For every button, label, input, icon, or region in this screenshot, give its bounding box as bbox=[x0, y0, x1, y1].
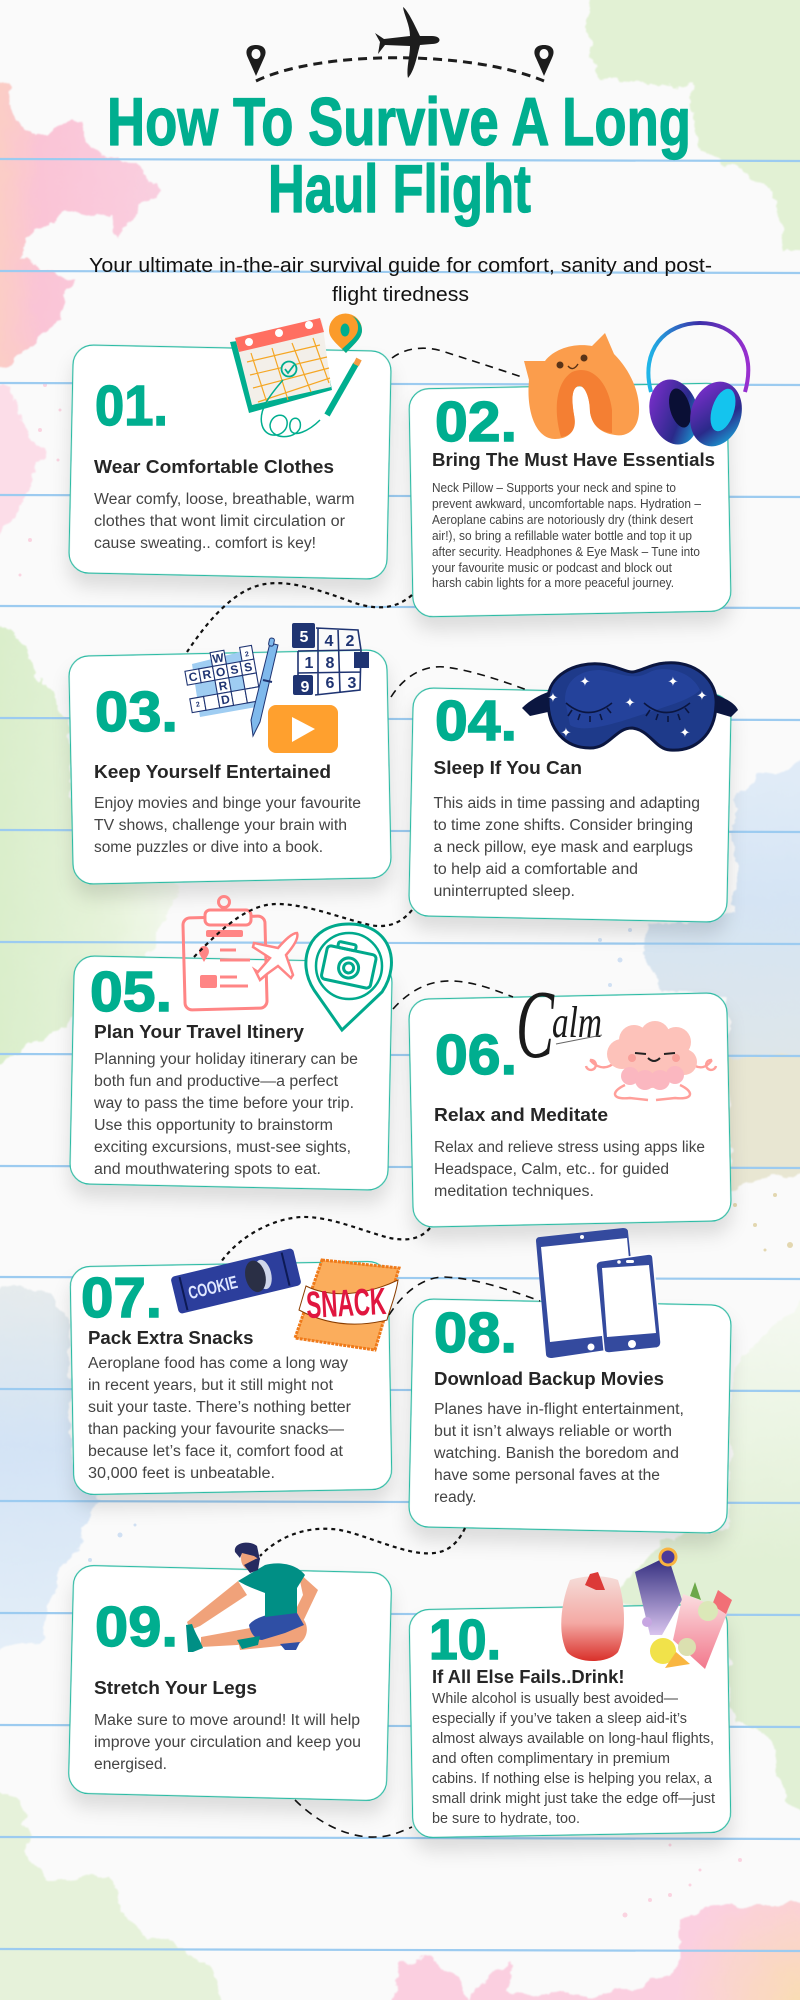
body text: Aeroplane cabins are notoriously dry (think desert bbox=[432, 513, 693, 527]
body text: in recent years, but it still might not bbox=[88, 1377, 334, 1394]
body text: especially if you’ve taken a sleep aid-it’s bbox=[432, 1711, 687, 1727]
number 05: 05. bbox=[90, 960, 172, 1024]
icon: sleep mask bbox=[522, 663, 738, 750]
heading: Pack Extra Snacks bbox=[88, 1328, 254, 1348]
body text: but it isn’t always reliable or worth bbox=[434, 1423, 672, 1440]
body text: Relax and relieve stress using apps like bbox=[434, 1139, 705, 1156]
panel: 10 if all else fails drink bbox=[409, 1604, 731, 1838]
icon: sudoku grid: 4 bbox=[325, 633, 334, 650]
icon: crossword: 2 bbox=[195, 701, 201, 709]
body text: than packing your favourite snacks— bbox=[88, 1421, 344, 1438]
panel: 03 keep yourself entertained bbox=[69, 650, 391, 884]
body text: This aids in time passing and adapting bbox=[434, 795, 700, 812]
icon: crossword: S bbox=[243, 660, 253, 675]
icon: tablet and phone bbox=[536, 1228, 661, 1358]
icon: crossword: W bbox=[211, 650, 226, 666]
panel: 04 sleep if you can bbox=[409, 688, 731, 922]
body text: and mouthwatering spots to eat. bbox=[94, 1161, 321, 1178]
body text: Enjoy movies and binge your favourite bbox=[94, 795, 361, 812]
icon: sleep mask: ✦ bbox=[580, 674, 591, 689]
icon: cookie bar: COOKIE bbox=[186, 1272, 240, 1303]
arrow: connector 06 to 07 bbox=[221, 1217, 430, 1262]
body text: Planning your holiday itinerary can be bbox=[94, 1051, 358, 1068]
number 09: 09. bbox=[95, 1595, 178, 1659]
body text bbox=[432, 481, 701, 590]
body text: because let’s face it, comfort food at bbox=[88, 1443, 344, 1460]
icon: sleep mask: ✦ bbox=[625, 695, 636, 710]
subtitle bbox=[89, 255, 712, 306]
icon: sleep mask: ✦ bbox=[548, 690, 559, 705]
body text bbox=[434, 1139, 705, 1200]
number 07: 07. bbox=[81, 1266, 162, 1330]
arrow: connector 05 to 06 bbox=[393, 981, 513, 1009]
subtitle: flight tiredness bbox=[332, 284, 469, 306]
heading: Plan Your Travel Itinery bbox=[94, 1022, 304, 1042]
body text: cabins. If nothing else is helping you relax, a bbox=[432, 1771, 713, 1787]
paint splatters bbox=[18, 383, 793, 1918]
panel: 09 stretch your legs bbox=[68, 1565, 392, 1801]
heading: Keep Yourself Entertained bbox=[94, 762, 331, 782]
heading: If All Else Fails..Drink! bbox=[432, 1667, 624, 1687]
icon: left map pin bbox=[246, 45, 266, 76]
body text: after security. Headphones & Eye Mask – Tune into bbox=[432, 545, 700, 559]
number 08: 08. bbox=[434, 1301, 517, 1365]
body text: ready. bbox=[434, 1489, 476, 1506]
heading: Wear Comfortable Clothes bbox=[94, 457, 334, 477]
body text: both fun and productive—a perfect bbox=[94, 1073, 339, 1090]
icon: pink drink with lemon bbox=[650, 1582, 732, 1669]
arrow: connector 04 to 05 bbox=[194, 904, 412, 957]
icon: play button bbox=[268, 705, 338, 753]
icon: neck pillow bbox=[524, 333, 639, 439]
icon: crossword: 2 bbox=[244, 651, 250, 659]
body text: TV shows, challenge your brain with bbox=[94, 817, 347, 834]
subtitle: Your ultimate in-the-air survival guide for comfort, sanity and post- bbox=[89, 255, 712, 277]
body text bbox=[94, 491, 354, 552]
body text: While alcohol is usually best avoided— bbox=[432, 1691, 678, 1707]
arrow: connector 03 to 04 bbox=[391, 667, 527, 697]
body text: improve your circulation and keep you bbox=[94, 1734, 361, 1751]
icon: calendar with pin and pen bbox=[230, 314, 362, 437]
icon: sudoku grid: 5 bbox=[300, 629, 309, 646]
icon: crossword: R bbox=[218, 678, 229, 694]
arrow: connector 07 to 08 bbox=[389, 1277, 540, 1315]
body text: exciting excursions, must-see sights, bbox=[94, 1139, 351, 1156]
body text: way to pass the time before your trip. bbox=[93, 1095, 354, 1112]
icon: purple drink bbox=[635, 1548, 682, 1635]
number 06: 06. bbox=[435, 1023, 517, 1087]
body text bbox=[432, 1691, 715, 1827]
heading: Download Backup Movies bbox=[434, 1369, 664, 1389]
body text: have some personal faves at the bbox=[434, 1467, 660, 1484]
icon: crossword: D bbox=[220, 692, 231, 707]
panel: 08 download backup movies bbox=[409, 1299, 731, 1533]
icon: headphones bbox=[642, 323, 750, 453]
icon: calm script: alm bbox=[552, 998, 602, 1047]
icon: calm script: C bbox=[516, 971, 555, 1079]
icon: stretching man bbox=[186, 1543, 318, 1652]
icon: aeroplane bbox=[375, 7, 440, 78]
body text: to time zone shifts. Consider bringing bbox=[434, 817, 693, 834]
body text: your favourite music or podcast and block out bbox=[432, 561, 672, 575]
body text: almost always available on long-haul flights, bbox=[432, 1731, 714, 1747]
body text: and often complimentary in premium bbox=[432, 1751, 670, 1767]
icon: cookie bar bbox=[170, 1248, 302, 1314]
body text: cause sweating.. comfort is key! bbox=[94, 535, 316, 552]
icon: cocktails bbox=[561, 1548, 732, 1669]
body text: energised. bbox=[94, 1756, 167, 1773]
body text: some puzzles or dive into a book. bbox=[94, 839, 323, 856]
icon: salmon aeroplane bbox=[253, 933, 297, 980]
icon: right map pin bbox=[534, 45, 554, 76]
icon: clipboard bbox=[183, 896, 267, 1010]
body text: Wear comfy, loose, breathable, warm bbox=[94, 491, 354, 508]
body text: small drink might just take the edge off—just bbox=[432, 1791, 715, 1807]
arrow: connector 09 to 10 bbox=[295, 1800, 412, 1837]
icon: sleep mask: ✦ bbox=[680, 725, 691, 740]
body text: clothes that wont limit circulation or bbox=[94, 513, 345, 530]
icon: sleep mask: ✦ bbox=[561, 725, 572, 740]
body text bbox=[94, 1712, 361, 1773]
icon: crossword: S bbox=[229, 662, 240, 677]
body text: Use this opportunity to brainstorm bbox=[94, 1117, 333, 1134]
icon: map pin with camera bbox=[306, 924, 391, 1030]
body text: be sure to hydrate, too. bbox=[432, 1811, 580, 1827]
body text bbox=[93, 1051, 358, 1178]
heading: Stretch Your Legs bbox=[94, 1678, 257, 1698]
icon: crossword: O bbox=[215, 664, 226, 680]
body text: a neck pillow, eye mask and earplugs bbox=[434, 839, 693, 856]
arrow: connector 02 to 03 bbox=[187, 583, 412, 652]
body text: meditation techniques. bbox=[434, 1183, 594, 1200]
icon: blue pen bbox=[251, 638, 278, 736]
body text: uninterrupted sleep. bbox=[434, 883, 575, 900]
panel: 05 plan your travel itinery bbox=[70, 956, 392, 1190]
icon: crossword bbox=[182, 645, 262, 717]
panel: 06 relax and meditate bbox=[409, 993, 731, 1227]
number 02: 02. bbox=[435, 390, 517, 454]
icon: snack bag: SNACK bbox=[305, 1281, 388, 1327]
panel: 02 must have essentials bbox=[409, 383, 731, 617]
body text: suit your taste. There’s nothing better bbox=[88, 1399, 351, 1416]
body text: harsh cabin lights for a more peaceful journey. bbox=[432, 576, 674, 590]
arrow: connector 08 to 09 bbox=[260, 1528, 465, 1556]
body text bbox=[434, 795, 700, 900]
body text: Neck Pillow – Supports your neck and spine to bbox=[432, 481, 676, 495]
icon: snack bag bbox=[295, 1260, 399, 1350]
heading: Sleep If You Can bbox=[434, 758, 582, 778]
body text: watching. Banish the boredom and bbox=[433, 1445, 679, 1462]
body text: 30,000 feet is unbeatable. bbox=[88, 1465, 275, 1482]
number 01: 01. bbox=[95, 374, 168, 438]
dashed flight arc bbox=[256, 58, 544, 81]
panel: 01 wear comfortable clothes bbox=[69, 345, 391, 579]
number 04: 04. bbox=[435, 689, 517, 753]
heading: Relax and Meditate bbox=[434, 1105, 608, 1125]
icon: sleep mask: ✦ bbox=[697, 688, 708, 703]
number 03: 03. bbox=[95, 680, 178, 744]
icon: sudoku grid: 9 bbox=[301, 679, 310, 696]
icon: sudoku grid: 3 bbox=[348, 675, 357, 692]
icon: crossword: C bbox=[188, 669, 199, 685]
icon: crossword: R bbox=[201, 667, 213, 682]
body text: Make sure to move around! It will help bbox=[94, 1712, 360, 1729]
title: Haul Flight bbox=[268, 151, 531, 227]
icon: sudoku grid bbox=[292, 623, 369, 696]
body text: to help aid a comfortable and bbox=[434, 861, 638, 878]
heading: Bring The Must Have Essentials bbox=[432, 450, 715, 470]
icon: strawberry drink bbox=[561, 1572, 624, 1661]
icon: sudoku grid: 8 bbox=[326, 655, 335, 672]
arrow: connector 01 to 02 bbox=[392, 348, 525, 378]
body text: air!), so bring a refillable water bottle and top it up bbox=[432, 529, 692, 543]
icon: sudoku grid: 1 bbox=[305, 655, 314, 672]
icon: meditating brain bbox=[586, 1021, 716, 1100]
panel: 07 pack extra snacks bbox=[70, 1261, 392, 1495]
flight path header graphic bbox=[246, 7, 554, 81]
number 10: 10. bbox=[429, 1608, 501, 1672]
body text: Headspace, Calm, etc.. for guided bbox=[434, 1161, 669, 1178]
body text: Aeroplane food has come a long way bbox=[88, 1355, 348, 1372]
body text bbox=[94, 795, 361, 856]
body text: Planes have in-flight entertainment, bbox=[434, 1401, 684, 1418]
icon: sudoku grid: 6 bbox=[326, 675, 335, 692]
body text bbox=[88, 1355, 351, 1482]
body text bbox=[433, 1401, 684, 1506]
icon: sleep mask: ✦ bbox=[668, 674, 679, 689]
body text: prevent awkward, uncomfortable naps. Hydration – bbox=[432, 497, 701, 511]
title bbox=[107, 84, 691, 227]
icon: sudoku grid: 2 bbox=[346, 633, 355, 650]
